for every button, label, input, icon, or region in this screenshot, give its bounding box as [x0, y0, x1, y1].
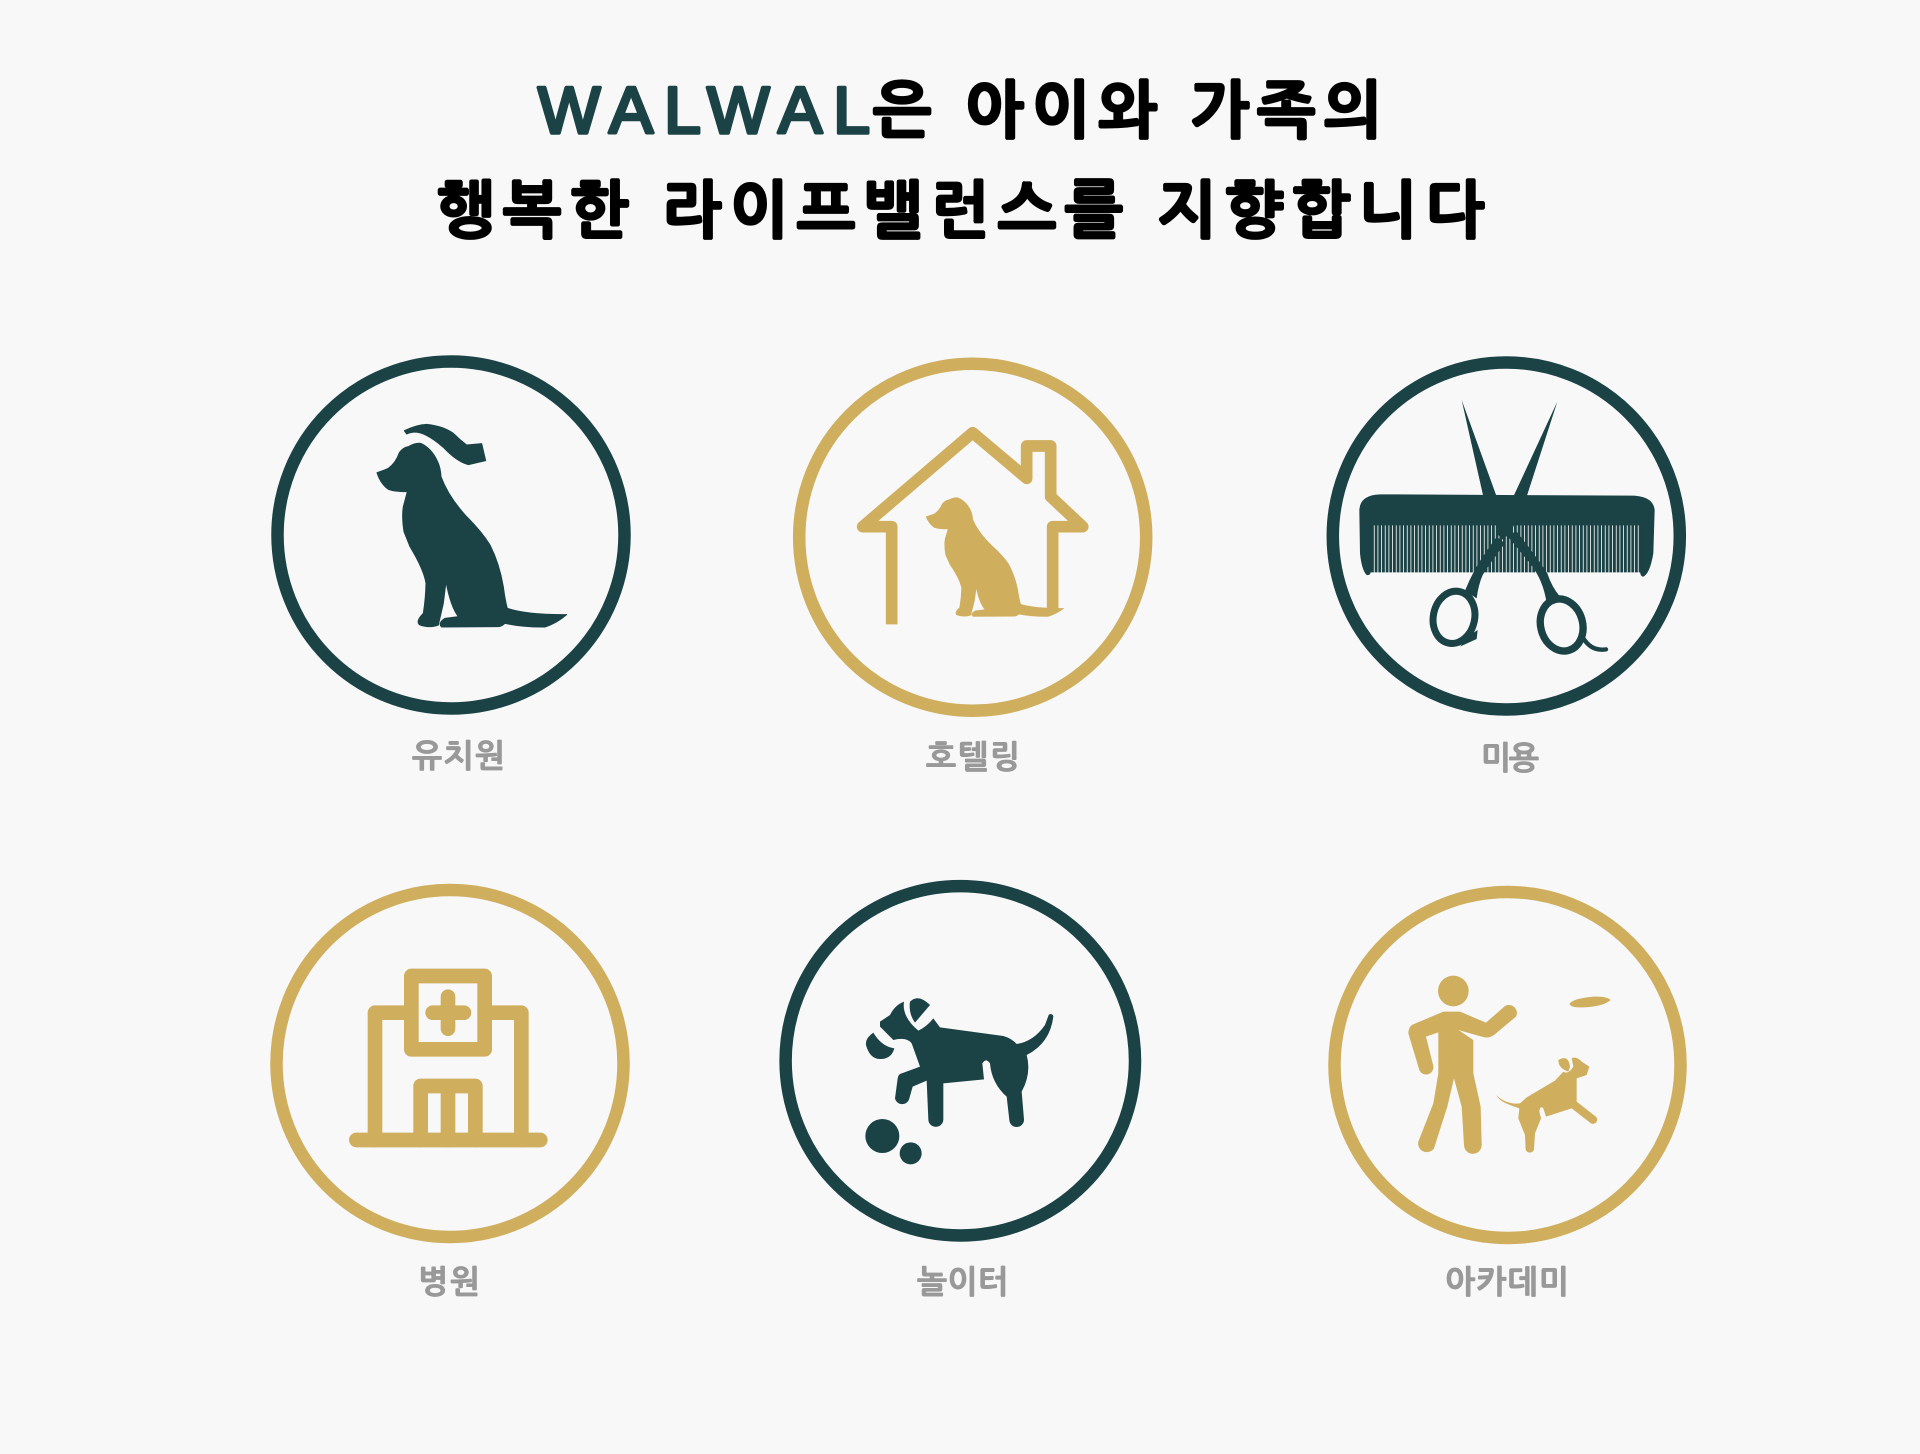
icon: person throwing frisbee to dog: [1408, 976, 1611, 1154]
icon: dog in house: [863, 433, 1083, 624]
panel: academy: [1334, 892, 1680, 1298]
icon: dog with balls: [865, 998, 1053, 1164]
label: kindergarten: 유치원: [412, 740, 505, 772]
panel: kindergarten: [278, 362, 624, 772]
icon: comb and scissors: [1359, 400, 1655, 656]
title: 은 아이와 가족의: [873, 79, 1382, 142]
label: playground: 놀이터: [917, 1266, 1008, 1298]
label: hospital: 병원: [418, 1266, 480, 1298]
title: WALWAL: [538, 73, 870, 147]
panel: playground: [786, 886, 1135, 1298]
label: academy: 아카데미: [1445, 1266, 1569, 1298]
title: 행복한 라이프밸런스를 지향합니다: [436, 179, 1484, 242]
icon: hospital building: [356, 976, 540, 1140]
label: grooming: 미용: [1481, 742, 1539, 774]
title: [436, 73, 1484, 242]
label: hotel: 호텔링: [926, 740, 1020, 773]
panel: hospital: [276, 890, 624, 1298]
panel: hotel: [799, 364, 1146, 773]
icon: sitting dog with petting hand: [377, 424, 567, 627]
panel: grooming: [1333, 362, 1680, 774]
